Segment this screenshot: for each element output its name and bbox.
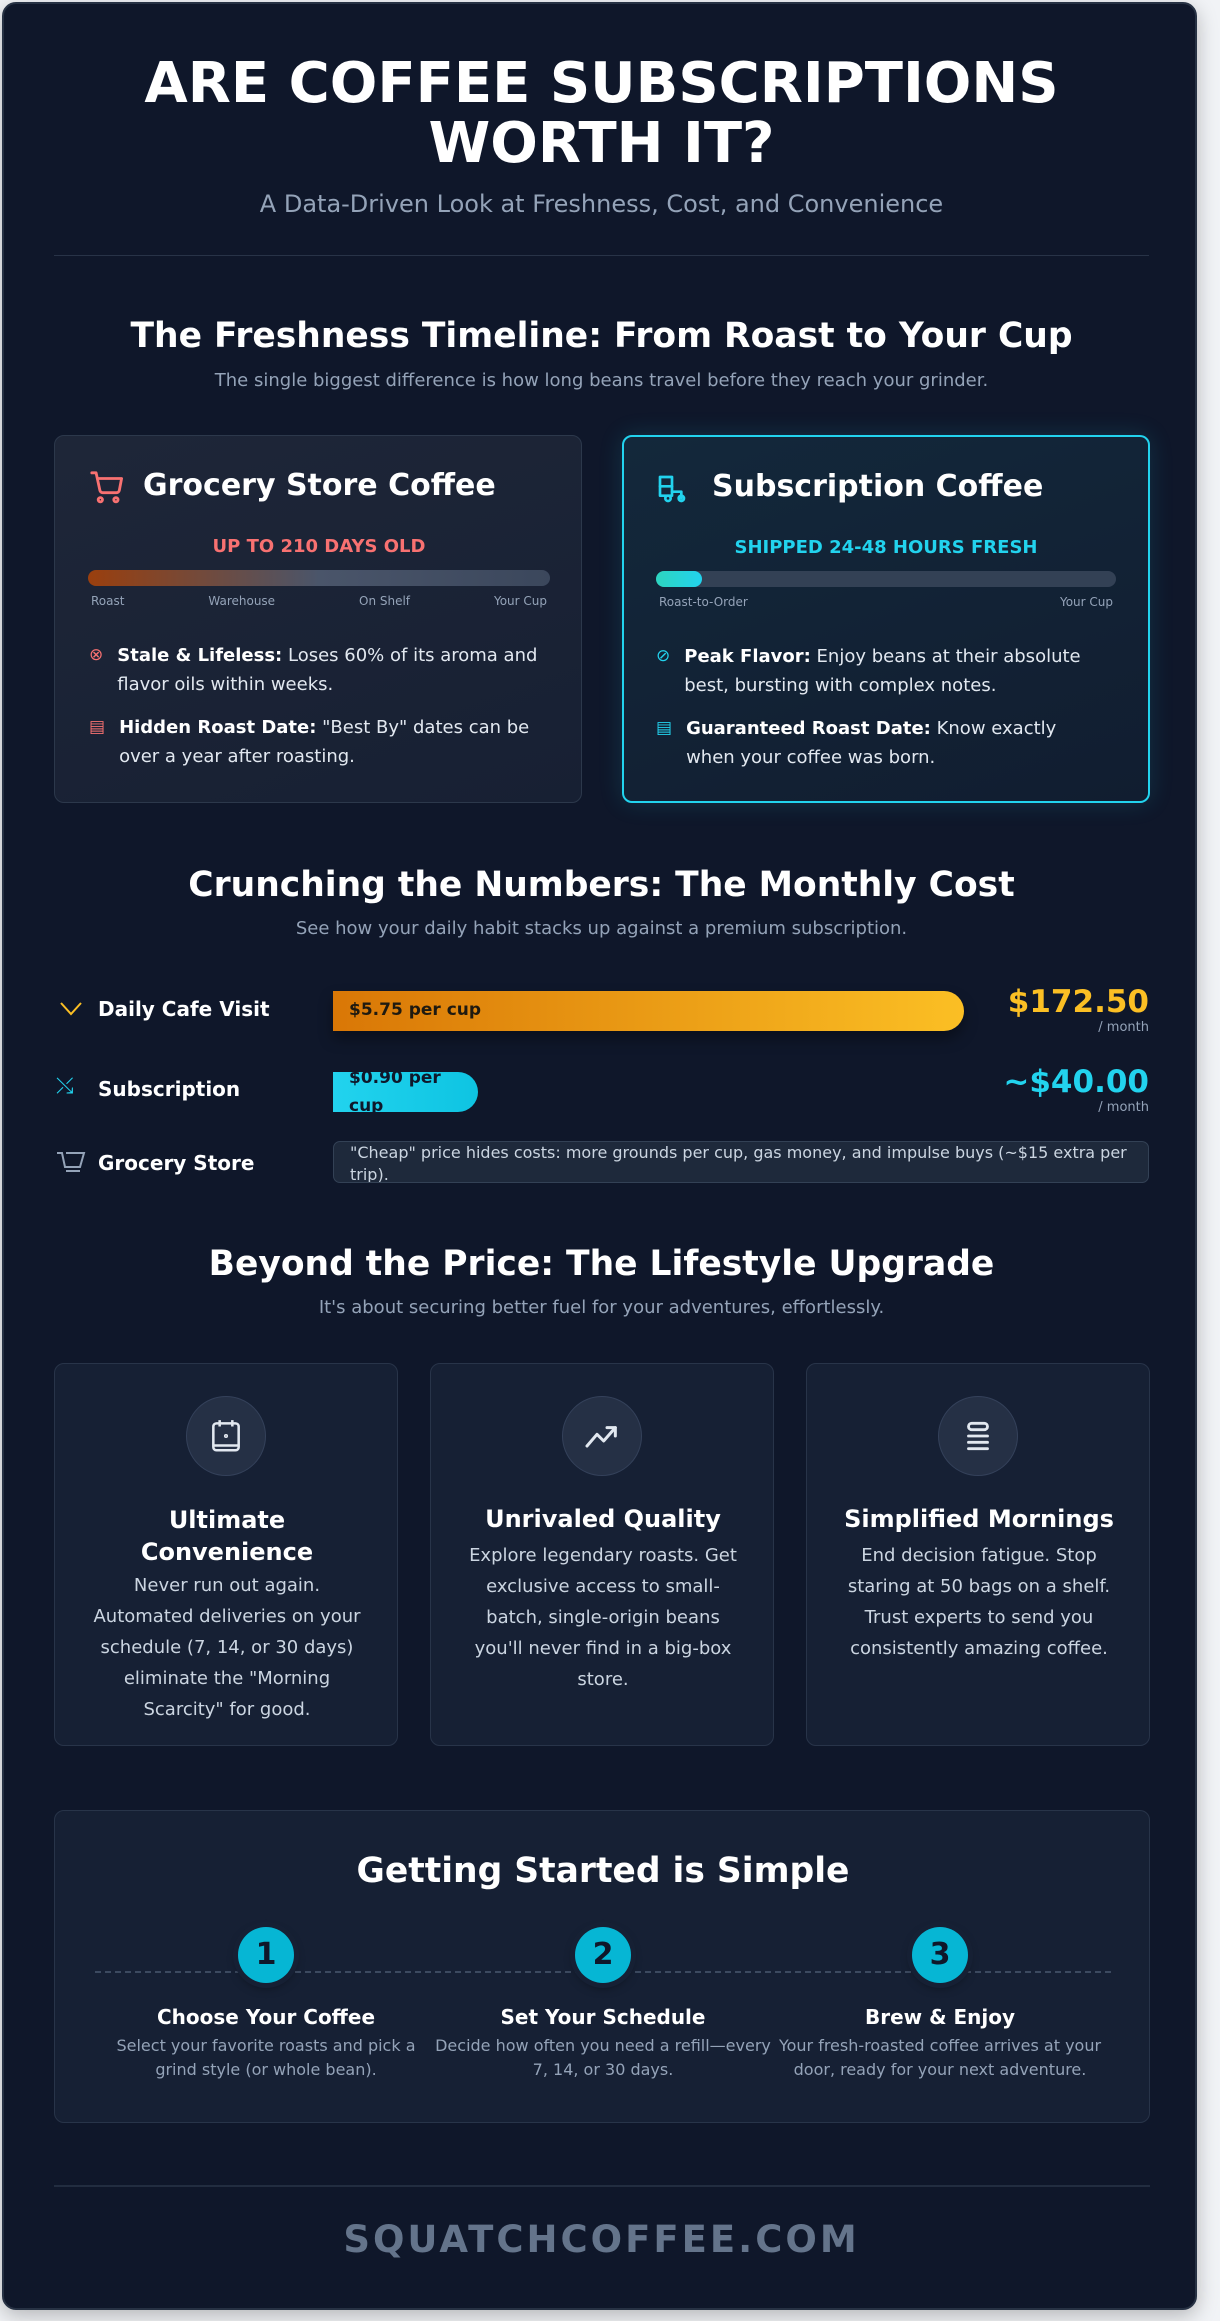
- feature: mornings: Simplified Mornings: [844, 1505, 1114, 1533]
- panel: subscription coffee: [622, 435, 1150, 803]
- subheading: cost: See how your daily habit stacks up against a premium subscription.: [296, 918, 907, 939]
- step 2: Decide how often you need a refill—every 7, 14, or 30 days.: [435, 2036, 771, 2079]
- step 3: Your fresh-roasted coffee arrives at your door, ready for your next adventure.: [779, 2036, 1101, 2079]
- step 3: Brew & Enjoy: [865, 2005, 1015, 2029]
- bullet: hidden date: Hidden Roast Date: "Best By" dates can be over a year after roasting.: [119, 717, 529, 767]
- step 3: [779, 1927, 1102, 2079]
- step 1: 1: [256, 1937, 276, 1972]
- feature: quality: Unrivaled Quality: [485, 1505, 721, 1533]
- timeline bar: [88, 570, 550, 586]
- feature: convenience: Ultimate Convenience: [141, 1506, 313, 1566]
- step 2: 2: [593, 1937, 613, 1972]
- timeline labels: [91, 594, 547, 608]
- price: cafe: / month: [1098, 1020, 1149, 1035]
- bullet: guaranteed date: Guaranteed Roast Date: Know exactly when your coffee was born.: [686, 718, 1056, 768]
- cost row: daily cafe: [60, 984, 1149, 1038]
- subheading: lifestyle: It's about securing better fuel for your adventures, effortlessly.: [319, 1297, 884, 1318]
- heading: freshness: The Freshness Timeline: From Roast to Your Cup: [130, 316, 1073, 356]
- feature: mornings: [806, 1363, 1150, 1746]
- icon: cart: [90, 471, 123, 504]
- feature: convenience: Never run out again. Automated deliveries on your schedule (7, 14, or 30 days) eliminate the "Morning Scarcity" for good.: [93, 1575, 361, 1720]
- timeline labels: On Shelf: [359, 594, 410, 608]
- bullet: peak flavor: ⊘: [656, 646, 670, 666]
- card title: Grocery Store Coffee: [143, 468, 496, 503]
- icon: truck: [658, 476, 686, 502]
- feature: mornings: End decision fatigue. Stop staring at 50 bags on a shelf. Trust experts to send you consistently amazing coffee.: [848, 1545, 1110, 1659]
- icon: calendar: [186, 1396, 266, 1476]
- feature: quality: Explore legendary roasts. Get exclusive access to small-batch, single-origin beans you'll never find in a big-box store.: [469, 1545, 737, 1690]
- bar: cafe: $5.75 per cup: [349, 1000, 481, 1020]
- card title: Subscription Coffee: [712, 469, 1043, 504]
- heading: getting started: Getting Started is Simple: [357, 1851, 849, 1891]
- subheading: freshness: The single biggest difference is how long beans travel before they reach your grinder.: [215, 370, 988, 391]
- panel: grocery store coffee: [54, 435, 582, 803]
- panel: getting started: [54, 1810, 1150, 2123]
- title: ARE COFFEE SUBSCRIPTIONS: [144, 51, 1059, 116]
- subtitle: A Data-Driven Look at Freshness, Cost, and Convenience: [260, 190, 943, 218]
- step 2: Set Your Schedule: [500, 2005, 705, 2029]
- cost row: grocery: [57, 1141, 1149, 1183]
- title: WORTH IT?: [428, 111, 775, 176]
- step 2: [435, 1927, 771, 2079]
- cost row: subscription: Subscription: [98, 1077, 240, 1101]
- price: subscription: ~$40.00: [1003, 1064, 1149, 1100]
- timeline labels: Warehouse: [208, 594, 275, 608]
- bar: cafe: [333, 991, 964, 1031]
- timeline labels: Roast: [91, 594, 124, 608]
- footer brand: SQUATCHCOFFEE.COM: [343, 2218, 860, 2261]
- cost row: subscription: [56, 1064, 1149, 1115]
- note box: "Cheap" price hides costs: more grounds per cup, gas money, and impulse buys (~$15 extra per trip).: [350, 1143, 1127, 1183]
- icon: stack: [938, 1396, 1018, 1476]
- icon: trend: [562, 1396, 642, 1476]
- feature: convenience: [54, 1363, 398, 1746]
- bar: subscription: [333, 1072, 478, 1112]
- step 1: [116, 1927, 416, 2079]
- age label: UP TO 210 DAYS OLD: [213, 536, 425, 557]
- bullet: stale: Stale & Lifeless: Loses 60% of its aroma and flavor oils within weeks.: [117, 645, 537, 695]
- heading: cost: Crunching the Numbers: The Monthly Cost: [188, 865, 1015, 905]
- step 1: Choose Your Coffee: [157, 2005, 375, 2029]
- cost row: daily cafe: Daily Cafe Visit: [98, 997, 270, 1021]
- timeline labels: Roast-to-Order: [659, 595, 748, 609]
- bullet: stale: ⊗: [89, 645, 103, 665]
- feature: quality: [430, 1363, 774, 1746]
- price: subscription: / month: [1098, 1100, 1149, 1115]
- cost row: grocery: Grocery Store: [98, 1151, 254, 1175]
- timeline bar: [656, 571, 1116, 587]
- bullet: guaranteed date: ▤: [656, 718, 672, 738]
- heading: lifestyle: Beyond the Price: The Lifestyle Upgrade: [209, 1244, 994, 1284]
- timeline labels: [659, 595, 1113, 609]
- timeline labels: Your Cup: [494, 594, 547, 608]
- freshness label: SHIPPED 24-48 HOURS FRESH: [734, 537, 1038, 558]
- icon: chevron: [60, 1002, 82, 1016]
- bullet: hidden date: ▤: [89, 717, 105, 737]
- icon: subscription: ⤯: [56, 1074, 74, 1099]
- price: cafe: $172.50: [1008, 984, 1149, 1020]
- icon: cart outline: [57, 1152, 86, 1172]
- step 3: 3: [930, 1937, 950, 1972]
- timeline labels: Your Cup: [1060, 595, 1113, 609]
- title: [144, 51, 1059, 176]
- bullet: peak flavor: Peak Flavor: Enjoy beans at their absolute best, bursting with complex notes.: [684, 646, 1081, 696]
- step 1: Select your favorite roasts and pick a grind style (or whole bean).: [116, 2036, 416, 2079]
